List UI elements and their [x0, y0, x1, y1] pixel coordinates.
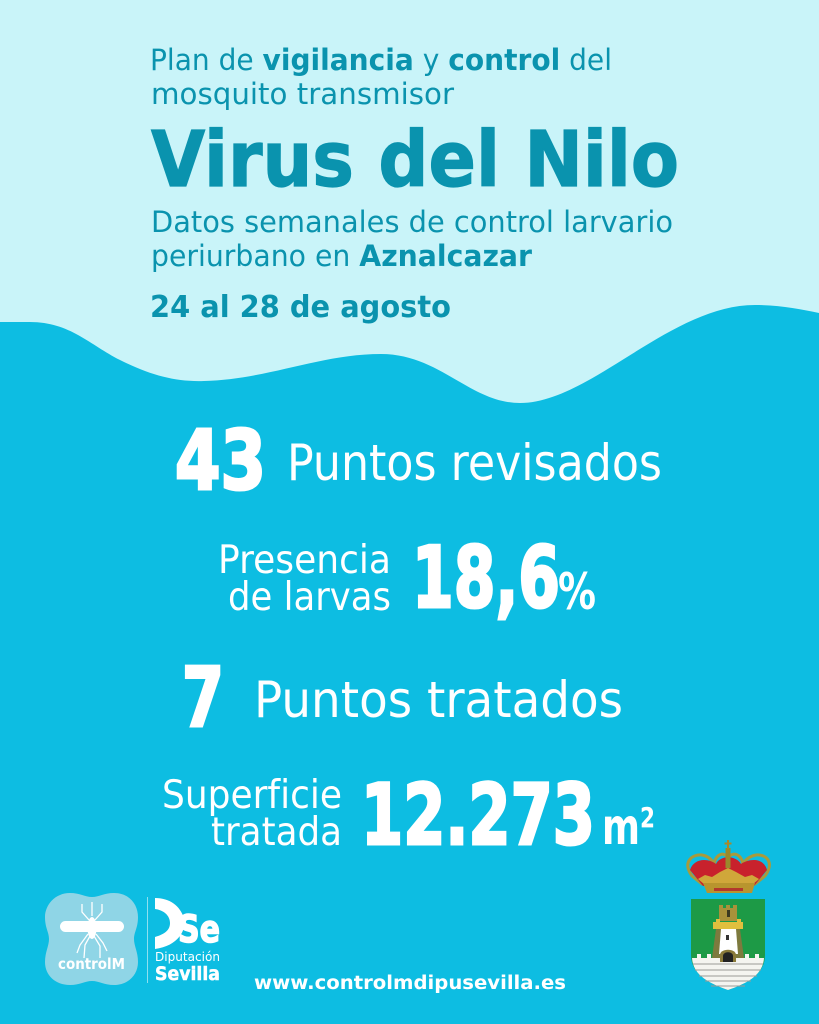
logo: Diputación de Sevilla: Diputación — [155, 950, 220, 964]
stat: superficie tratada — [162, 766, 655, 864]
stat: puntos revisados — [175, 414, 662, 509]
logo: Diputación de Sevilla — [147, 897, 220, 985]
stat: superficie tratada: 12.273 — [361, 766, 595, 864]
stat: superficie tratada: m — [602, 798, 640, 856]
stat: presencia de larvas: % — [558, 563, 596, 621]
logo: controlM — [45, 893, 138, 985]
heading: plan de vigilancia: mosquito transmisor — [151, 77, 454, 111]
coat of arms — [688, 840, 769, 990]
stat: puntos revisados: 43 — [175, 414, 266, 509]
heading: plan de vigilancia: Plan de vigilancia y control del — [150, 43, 612, 77]
logo: controlM: controlM — [58, 955, 125, 973]
logo: Diputación de Sevilla: Se — [178, 908, 220, 951]
tower — [712, 905, 744, 962]
stat: superficie tratada: tratada — [211, 810, 342, 855]
title: Virus del Nilo — [151, 116, 679, 205]
icon: mosquito — [60, 902, 124, 958]
subtitle: periurbano en Aznalcazar — [151, 239, 533, 273]
logo: Diputación de Sevilla: Sevilla — [155, 963, 220, 985]
stat: presencia de larvas: Presencia — [218, 538, 391, 583]
subtitle — [151, 205, 673, 273]
shield — [691, 899, 765, 990]
stat: puntos revisados: Puntos revisados — [287, 434, 662, 492]
stat: presencia de larvas: 18,6 — [412, 529, 560, 628]
stat: presencia de larvas: de larvas — [228, 575, 391, 620]
wall — [692, 954, 764, 990]
website url: www.controlmdipusevilla.es — [254, 973, 566, 994]
heading: plan de vigilancia — [150, 43, 612, 111]
stat: superficie tratada: Superficie — [162, 773, 342, 818]
crown — [688, 840, 769, 893]
stat: puntos tratados: 7 — [182, 651, 224, 746]
date: 24 al 28 de agosto — [150, 290, 451, 325]
stat: superficie tratada: 2 — [640, 801, 655, 834]
stat: presencia de larvas — [218, 529, 596, 628]
stat: puntos tratados — [182, 651, 623, 746]
stat: puntos tratados: Puntos tratados — [254, 671, 623, 729]
panel: light header with wave — [0, 0, 819, 403]
subtitle: Datos semanales de control larvario — [151, 205, 673, 239]
